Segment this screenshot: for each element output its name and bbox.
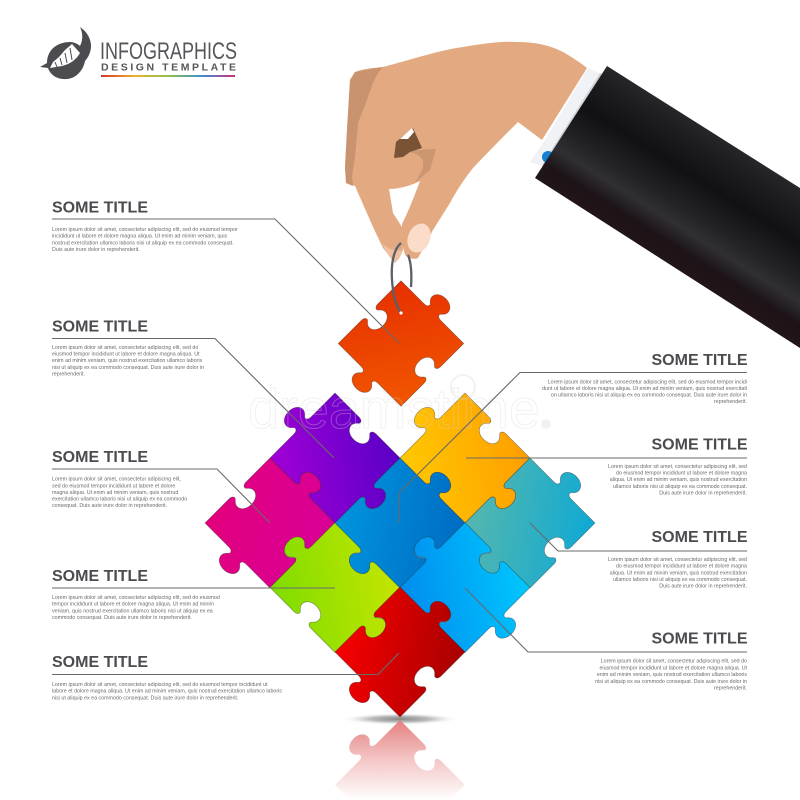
description: enim ad minim veniam, quis nostrud exercitation ullamco laboris bbox=[52, 358, 202, 364]
logo subtitle: DESIGN TEMPLATE bbox=[101, 62, 236, 74]
callout 2 bbox=[52, 318, 334, 458]
description: Lorem ipsum dolor sit amet, consectetur adipiscing elit, sed bbox=[608, 464, 747, 470]
piece: magenta bbox=[191, 444, 349, 602]
description: do eiusmod tempor incididunt ut labore et dolore magna bbox=[616, 471, 747, 477]
reflection of red piece bbox=[335, 720, 465, 800]
watermark bbox=[248, 375, 551, 440]
watermark word: dreamstime bbox=[248, 377, 540, 440]
title: SOME TITLE bbox=[652, 529, 748, 546]
description: veniam, quis nostrud exercitation ullamco laboris nisi ut aliquip ex ea bbox=[52, 608, 213, 614]
piece: orange bbox=[386, 379, 544, 537]
logo bbox=[40, 27, 237, 79]
leader line bbox=[52, 219, 399, 343]
callout 3 bbox=[52, 449, 270, 523]
description: nisi ut aliquip ex ea commodo consequat. Duis aute irure dolor in bbox=[52, 365, 204, 371]
description: reprehenderit. bbox=[714, 686, 747, 692]
description: Lorem ipsum dolor sit amet, consectetur adipiscing elit, sed bbox=[608, 557, 747, 563]
logo title: INFOGRAPHICS bbox=[100, 38, 237, 65]
callout 1 bbox=[52, 200, 399, 343]
callout 7 bbox=[466, 436, 748, 496]
callout 9 bbox=[465, 588, 748, 692]
hand shadow side bbox=[345, 67, 383, 186]
description: Duis aute irure dolor in reprehenderit. bbox=[659, 584, 747, 590]
description: eiusmod tempor incididunt ut labore et dolore magna aliqua. Ut bbox=[52, 352, 200, 358]
title: SOME TITLE bbox=[52, 654, 148, 671]
description: reprehenderit. bbox=[52, 371, 85, 377]
leader line bbox=[52, 338, 334, 458]
description: do eiusmod tempor incididunt ut labore et dolore magna bbox=[616, 564, 747, 570]
thumb fold shadow bbox=[410, 149, 436, 183]
cuff button bbox=[542, 151, 554, 163]
leader line bbox=[465, 588, 747, 652]
description: Lorem ipsum dolor sit amet, consectetur adipiscing elit, sed do bbox=[52, 345, 198, 351]
callout 8 bbox=[530, 523, 748, 590]
description: Lorem ipsum dolor sit amet, consectetur adipiscing elit, sed do eiusmod tempor incididunt ut bbox=[52, 682, 268, 688]
description: reprehenderit. bbox=[714, 399, 747, 405]
description: aliqua. Ut enim ad minim veniam, quis nostrud exercitation bbox=[610, 570, 747, 576]
description: Duis aute irure dolor in reprehenderit. bbox=[659, 490, 747, 496]
description: nostrud exercitation ullamco laboris nisi ut aliquip ex ea commodo consequat. bbox=[52, 240, 234, 246]
description: eiusmod tempor incididunt ut labore et dolore magna aliqua. Ut bbox=[599, 665, 748, 671]
leader line bbox=[52, 587, 335, 589]
title: SOME TITLE bbox=[52, 568, 148, 585]
rainbow rule bbox=[101, 75, 235, 77]
callout 6 bbox=[399, 352, 748, 523]
piece: loose orange-red bbox=[325, 267, 477, 420]
floor shadow bbox=[340, 713, 460, 725]
gap highlight bbox=[400, 128, 414, 139]
watermark emblem bbox=[451, 375, 475, 399]
description: exercitation ullamco laboris nisi ut aliquip ex ea commodo bbox=[52, 497, 187, 503]
description: dunt ut labore et dolore magna aliqua. Ut enim ad minim veniam, quis nostrud exercitati bbox=[542, 386, 747, 392]
description: Lorem ipsum dolor sit amet, consectetur adipiscing elit, sed do eiusmod tempor bbox=[52, 227, 238, 233]
description: nisi ut aliquip ex ea commodo consequat. Duis aute irure dolor in reprehenderit. bbox=[52, 695, 238, 701]
ring bbox=[392, 243, 411, 313]
description: nisi ut aliquip ex ea commodo consequat. Duis aute irure dolor in bbox=[595, 679, 747, 685]
finger gap bbox=[394, 128, 422, 158]
leader line bbox=[52, 469, 270, 523]
piece: red bbox=[321, 573, 479, 731]
ring hole bbox=[399, 311, 403, 315]
title: SOME TITLE bbox=[52, 449, 148, 466]
icon: logo swirl bbox=[40, 27, 91, 79]
description: Duis aute irure dolor in reprehenderit. bbox=[52, 247, 140, 253]
hand bbox=[345, 42, 587, 263]
piece: teal bbox=[451, 444, 609, 602]
sleeve and hand bbox=[345, 42, 800, 348]
description: labore et dolore magna aliqua. Ut enim ad minim veniam, quis nostrud exercitation ullamco laboris bbox=[52, 689, 282, 695]
callout 5 bbox=[52, 653, 399, 701]
description: ullamco laboris nisi ut aliquip ex ea commodo consequat. bbox=[613, 577, 747, 583]
description: commodo consequat. Duis aute irure dolor in reprehenderit. bbox=[52, 615, 192, 621]
piece: purple bbox=[256, 379, 414, 537]
description: incididunt ut labore et dolore magna aliqua. Ut enim ad minim veniam, quis bbox=[52, 234, 228, 240]
description: sed do eiusmod tempor incididunt ut labore et dolore bbox=[52, 483, 175, 489]
leader line bbox=[52, 653, 399, 674]
description: Lorem ipsum dolor sit amet, consectetur adipiscing elit, sed do eiusmod tempor incidi bbox=[548, 379, 747, 385]
description: tempor incididunt ut labore et dolore magna aliqua. Ut enim ad minim bbox=[52, 602, 215, 608]
title: SOME TITLE bbox=[52, 318, 148, 336]
description: Lorem ipsum dolor sit amet, consectetur adipiscing elit, bbox=[52, 477, 181, 483]
title: SOME TITLE bbox=[652, 352, 748, 369]
description: magna aliqua. Ut enim ad minim veniam, quis nostrud bbox=[52, 490, 178, 496]
description: aliqua. Ut enim ad minim veniam, quis nostrud exercitation bbox=[610, 477, 747, 483]
leader line bbox=[399, 372, 747, 523]
description: on ullamco laboris nisi ut aliquip ex ea commodo consequat. Duis aute irure dolor in bbox=[551, 393, 747, 399]
callout 4 bbox=[52, 568, 335, 621]
title: SOME TITLE bbox=[652, 630, 748, 648]
description: consequat. Duis aute irure dolor in reprehenderit. bbox=[52, 503, 167, 509]
piece: green bbox=[256, 509, 414, 666]
leader line bbox=[530, 523, 747, 551]
piece: sky blue bbox=[386, 509, 544, 666]
thumbnail bbox=[403, 220, 435, 256]
shirt cuff bbox=[530, 68, 604, 167]
leader line bbox=[466, 457, 747, 459]
watermark mark bbox=[541, 419, 551, 429]
jacket sleeve bbox=[535, 66, 800, 348]
piece: blue bbox=[321, 444, 479, 602]
description: Lorem ipsum dolor sit amet, consectetur adipiscing elit, sed do bbox=[601, 658, 747, 664]
puzzle bbox=[191, 267, 609, 731]
fingertip bbox=[382, 243, 402, 263]
description: ullamco laboris nisi ut aliquip ex ea commodo consequat. bbox=[613, 484, 747, 490]
title: SOME TITLE bbox=[52, 200, 148, 216]
description: enim ad minim veniam, quis nostrud exercitation ullamco laboris bbox=[597, 672, 747, 678]
description: Lorem ipsum dolor sit amet, consectetur adipiscing elit, sed do eiusmod bbox=[52, 595, 220, 601]
title: SOME TITLE bbox=[652, 436, 748, 454]
